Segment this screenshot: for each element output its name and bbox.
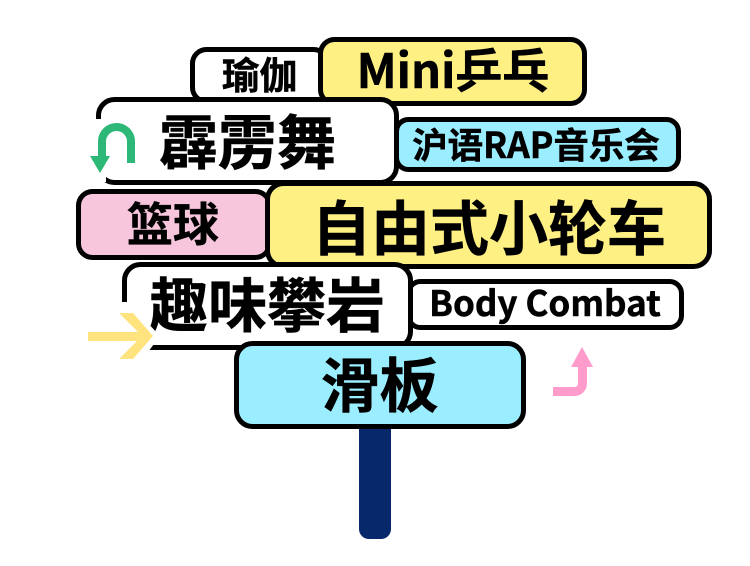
sign: body combat: Body Combat [429,276,661,327]
icon: green u-turn arrow [84,119,131,182]
sign: yoga: 瑜伽 [222,45,297,100]
sign: basketball [78,189,270,258]
sign: skateboard: 滑板 [320,339,439,424]
sign: freestyle BMX: 自由式小轮车 [312,182,666,267]
sign: basketball: 篮球 [127,189,219,255]
sign: breakdance [98,96,396,182]
sign: breakdance: 霹雳舞 [159,96,336,181]
icon: pink turn-up arrow [553,347,593,392]
sign: fun climbing: 趣味攀岩 [149,259,385,344]
sign: mini table tennis: Mini乒乓 [357,33,549,102]
sign: yoga [192,45,328,102]
sign: rap concert: 沪语RAP音乐会 [412,118,660,169]
sign: skateboard [236,339,524,426]
signpost pole [359,425,391,539]
icon: yellow right arrow [84,302,160,359]
